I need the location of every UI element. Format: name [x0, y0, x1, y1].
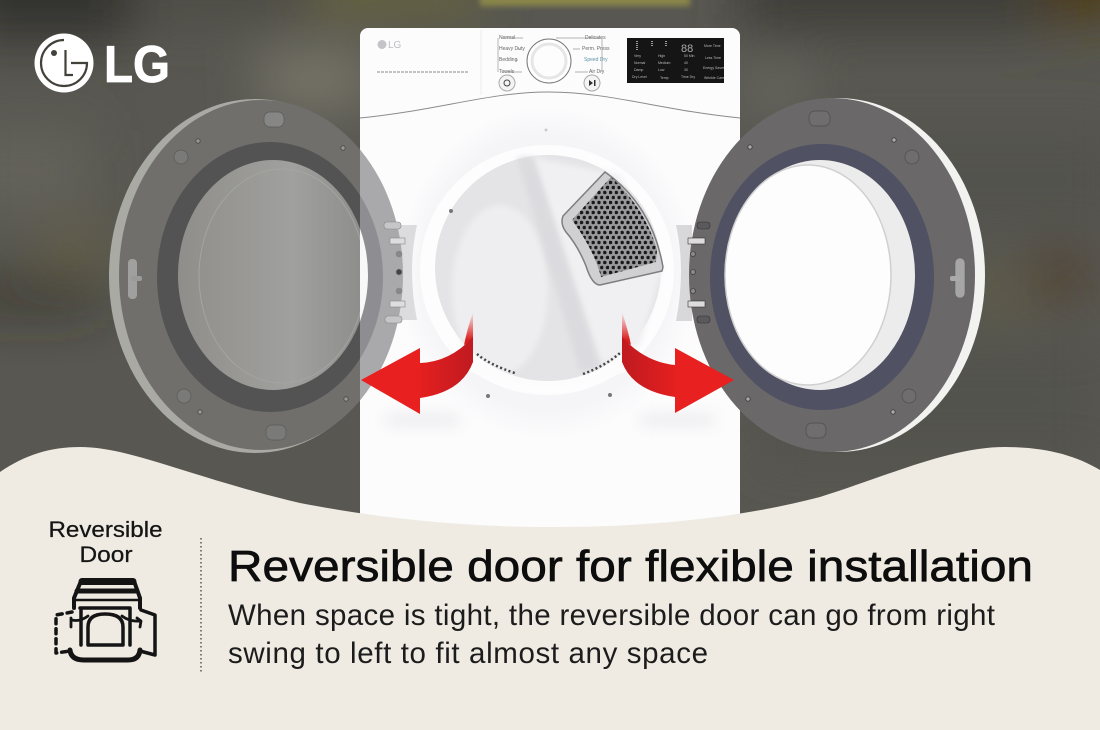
logo wordmark: LG [104, 36, 170, 94]
recess shadows [385, 416, 460, 424]
right door seal [710, 144, 934, 410]
arrow: left swing [361, 312, 473, 414]
feature label [48, 517, 162, 567]
cycle labels: Speed Dry [584, 57, 608, 63]
logo emblem [34, 34, 94, 92]
control panel seam [360, 92, 740, 118]
feature label: Door [80, 542, 132, 567]
left door latch [128, 259, 142, 299]
display panel: 50 Min [684, 54, 695, 58]
display panel: Less Time [705, 56, 721, 60]
cycle labels: Heavy Duty [499, 46, 525, 52]
bottom cream panel [0, 447, 1100, 730]
cycle labels: Air Dry [589, 69, 605, 75]
icon: reversible door dryer [56, 581, 155, 660]
display panel: Temp [660, 76, 669, 80]
cycle labels: Bedding [499, 57, 518, 63]
screws [449, 128, 612, 398]
power button [499, 75, 515, 91]
right door glass [725, 160, 915, 390]
start button [584, 75, 600, 91]
body text: swing to left to fit almost any space [228, 637, 708, 670]
door recess [397, 106, 697, 440]
cycle labels: Perm. Press [582, 46, 610, 52]
right door bumpers [806, 111, 919, 438]
right door hinge [688, 222, 710, 323]
recess shadow right [640, 416, 715, 424]
drum opening [435, 155, 662, 386]
right door screws [746, 138, 896, 414]
dial [527, 39, 571, 83]
display panel: Damp [634, 68, 643, 72]
cycle labels [499, 35, 610, 75]
left door: translucent [109, 99, 405, 453]
heading: Reversible door for flexible installation [228, 542, 1033, 591]
right door latch [950, 258, 965, 298]
arrow: right swing [622, 312, 734, 413]
panel LG mark [378, 40, 402, 51]
display panel: Wrinkle Care [704, 76, 724, 80]
display panel: 40 [684, 61, 688, 65]
display panel: 30 [684, 68, 688, 72]
cycle labels: Normal [499, 35, 515, 41]
cycle labels: Delicates [585, 35, 606, 41]
right hinge plate [676, 225, 692, 321]
display panel: Dry Level [632, 75, 647, 79]
body text [228, 599, 995, 670]
dotted divider [200, 538, 202, 672]
dryer body [360, 28, 740, 538]
display panel: More Time [704, 44, 721, 48]
left hinge plate [396, 225, 417, 320]
part over background [109, 99, 360, 453]
panel LG mark: LG [388, 40, 402, 51]
display panel: Normal [634, 61, 646, 65]
part over dryer body [360, 150, 403, 400]
left door hinge [384, 222, 405, 323]
right door [688, 98, 985, 452]
display panel [627, 38, 725, 83]
display panel: Energy Saver [703, 66, 725, 70]
left door bumpers [174, 112, 286, 440]
display panel: 88 [681, 43, 693, 55]
display panel: High [658, 54, 665, 58]
cycle labels: Towels [499, 69, 515, 75]
lint filter grille [562, 172, 663, 285]
display panel: Low [658, 68, 665, 72]
feature label: Reversible [48, 517, 162, 542]
display panel: Very [634, 54, 641, 58]
display panel: Time Dry [681, 75, 695, 79]
display panel: Medium [658, 61, 671, 65]
background: blurred room [0, 0, 1100, 530]
body text: When space is tight, the reversible door can go from right [228, 599, 995, 632]
LG logo [34, 34, 170, 94]
left door screws [196, 139, 348, 414]
